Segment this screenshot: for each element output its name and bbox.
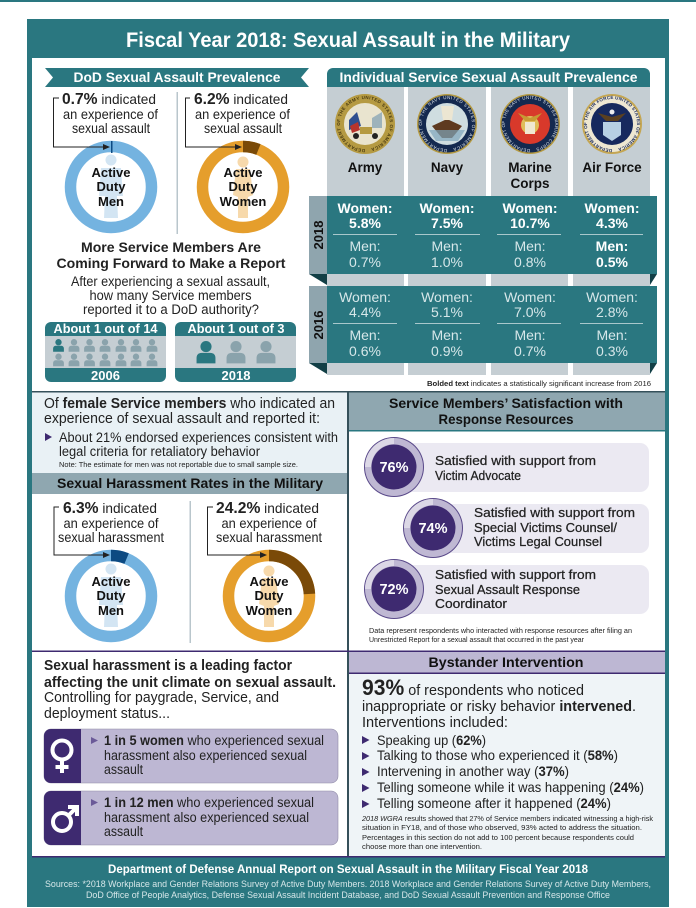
donut: men harassment: Men (98, 603, 124, 618)
service names: Army (348, 160, 383, 175)
women harassment text (216, 500, 322, 545)
service names: Marine (508, 160, 552, 175)
table: 2016: Women: (339, 289, 391, 305)
panel: bystander intervention (349, 652, 665, 857)
bystander bullets: Telling someone after it happened (24%) (377, 795, 611, 811)
seal: Air Force: DEPARTMENT OF THE AIR FORCE UNITED STATES OF AMERICA (584, 96, 640, 152)
service names: Navy (431, 160, 464, 175)
factor text: deployment status... (44, 706, 170, 722)
table: 2016: 7.0% (514, 304, 546, 320)
panel: retaliation: Of female Service members who indicated an (44, 395, 335, 412)
reporting question: how many Service members (90, 288, 252, 303)
bystander bullets: Intervening in another way (37%) (377, 763, 569, 779)
heading: satisfaction: Service Members’ Satisfaction with (389, 395, 623, 411)
callout: men (44, 791, 338, 845)
table: 2018: 0.7% (349, 254, 381, 270)
table: 2016: Men: (596, 327, 628, 343)
panel: harassment factor (32, 652, 347, 857)
box: 2018: 2018 (222, 368, 250, 383)
donut: women harassment: Active (249, 574, 289, 589)
bystander statement: Interventions included: (362, 714, 508, 731)
item: victim advocate (364, 437, 649, 497)
table: 2018 (309, 196, 657, 285)
donut: men harassment (70, 555, 152, 636)
table: 2018: Women: (338, 200, 392, 216)
bystander footnote: 2018 WGRA results showed that 27% of Service members indicated witnessing a high-risk (361, 814, 653, 823)
table: 2018: Men: (431, 238, 463, 254)
heading: bystander (349, 652, 665, 674)
satisfaction footnote (369, 628, 632, 644)
item: SARC (364, 559, 649, 619)
box: 2006: 2006 (91, 368, 120, 383)
factor text: Sexual harassment is a leading factor (44, 658, 292, 674)
table: 2016: Men: (431, 327, 463, 343)
item: SARC: 72% (379, 582, 409, 598)
table: 2018: 1.0% (431, 254, 463, 270)
panel: retaliation: Note: The estimate for men was not reportable due to small sample size. (59, 462, 298, 469)
bystander bullets: Talking to those who experienced it (58%) (377, 747, 618, 763)
men assault text (62, 91, 158, 136)
arrowhead (235, 144, 242, 150)
table: 2016: 4.4% (349, 304, 381, 320)
heading: harassment rates: Sexual Harassment Rates in the Military (57, 475, 323, 491)
bystander bullets: Speaking up (62%) (377, 732, 486, 748)
men harassment text: sexual harassment (58, 529, 164, 545)
arrow: women harassment (208, 507, 260, 555)
table note: Bolded text indicates a statistically significant increase from 2016 (427, 379, 651, 388)
donut: active duty men assault: Men (98, 194, 124, 209)
donut: men harassment: Duty (97, 588, 126, 603)
table: 2018: 2018 (311, 221, 326, 249)
box: 2018 (175, 322, 296, 383)
table: 2018: Women: (503, 200, 557, 216)
callout: women: 1 in 5 women who experienced sexual (104, 733, 324, 748)
reporting heading: More Service Members Are (81, 239, 261, 255)
table: 2016: 2016 (311, 311, 326, 339)
men harassment text: an experience of (64, 515, 159, 531)
seal: Army: DEPARTMENT OF THE ARMY UNITED STATES OF AMERICA (336, 96, 393, 152)
box: 2006 (45, 322, 166, 383)
heading: satisfaction: Response Resources (438, 411, 574, 427)
service heading: Individual Service Sexual Assault Prevalence (340, 69, 638, 85)
callout: men: assault (104, 824, 143, 839)
item: SARC: Coordinator (435, 596, 508, 611)
factor text (44, 658, 336, 722)
icon: male symbol (53, 807, 77, 831)
donut: women harassment (228, 556, 310, 636)
item: special victims counsel (403, 498, 649, 558)
donut: active duty women assault: Women (220, 194, 266, 209)
reporting heading (56, 239, 286, 271)
reporting question (71, 274, 270, 317)
heading: satisfaction (349, 392, 665, 431)
item: victim advocate: Satisfied with support from (435, 453, 596, 468)
table: 2016: 0.9% (431, 343, 463, 359)
women harassment text: an experience of (222, 515, 317, 531)
panel: retaliation: About 21% endorsed experiences consistent with (59, 430, 338, 445)
table: 2018: 0.8% (514, 254, 546, 270)
box: 2018: About 1 out of 3 (188, 322, 285, 336)
seal: Marine Corps: DEPARTMENT OF THE NAVY UNITED STATES MARINE CORPS (502, 96, 558, 152)
panel: retaliation: legal criteria for retaliatory behavior (59, 444, 260, 459)
ribbon: DoD prevalence heading (45, 68, 309, 87)
table: 2016: 0.6% (349, 343, 381, 359)
bystander statement (362, 675, 636, 731)
donut: active duty women assault: Active (223, 165, 263, 180)
table: 2016: Men: (514, 327, 546, 343)
table: 2016 (309, 286, 657, 374)
donut: active duty men assault: Duty (97, 179, 126, 194)
reporting question: After experiencing a sexual assault, (71, 274, 270, 289)
bystander bullets (362, 732, 644, 811)
table: 2018: Men: (349, 238, 381, 254)
item: SARC: Satisfied with support from (435, 567, 596, 582)
men harassment text (58, 500, 164, 545)
arrow: men harassment (54, 507, 104, 555)
panel: prevalence (32, 58, 665, 391)
donut: active duty women assault (202, 146, 284, 228)
seal: Navy: DEPARTMENT OF THE NAVY UNITED STATES OF AMERICA (418, 96, 476, 152)
callout: women: assault (104, 762, 143, 777)
bystander footnote: situation in FY18, and of those who observed, 93% acted to address the situation. (362, 823, 642, 832)
table: 2018: 5.8% (349, 215, 382, 231)
men assault text: sexual assault (72, 120, 150, 136)
panel: sexual harassment rates (32, 473, 347, 651)
women harassment text: 24.2% indicated (216, 500, 319, 517)
arrowhead (103, 144, 110, 150)
satisfaction footnote: Data represent respondents who interacted with response resources after filing an (369, 628, 632, 635)
reporting question: reported it to a DoD authority? (83, 302, 259, 317)
table: 2018: 0.5% (596, 254, 629, 270)
bystander statement: 93% of respondents who noticed (362, 675, 584, 700)
heading: harassment rates (32, 473, 347, 494)
panel: retaliation (32, 392, 347, 473)
men assault text: an experience of (63, 106, 158, 122)
table: 2016: Women: (586, 289, 638, 305)
heading: bystander: Bystander Intervention (428, 654, 584, 670)
table: 2016: 2.8% (596, 304, 628, 320)
bystander footnote: Percentages in this section do not add to 100 percent because respondents could (362, 833, 634, 842)
item: special victims counsel: 74% (418, 521, 448, 537)
item: victim advocate: Victim Advocate (435, 468, 521, 483)
service columns (327, 87, 650, 375)
donut: active duty men assault (70, 141, 152, 228)
item: victim advocate: 76% (379, 460, 409, 476)
bystander footnote (361, 814, 653, 851)
service names: Air Force (582, 160, 642, 175)
women assault text: sexual assault (204, 120, 282, 136)
ribbon: DoD prevalence heading: DoD Sexual Assault Prevalence (74, 69, 281, 85)
women harassment text: sexual harassment (216, 529, 322, 545)
footer (45, 864, 651, 900)
item: special victims counsel: Satisfied with support from (474, 505, 635, 520)
men harassment text: 6.3% indicated (63, 500, 157, 517)
donut: women harassment: Duty (255, 588, 284, 603)
donut: women harassment: Women (246, 603, 292, 618)
item: SARC: Sexual Assault Response (435, 582, 580, 597)
arrowhead (103, 552, 110, 558)
footer: Department of Defense Annual Report on Sexual Assault in the Military Fiscal Year 2018 (108, 864, 589, 876)
table: 2018: 4.3% (596, 215, 629, 231)
item: special victims counsel: Special Victims Counsel/ (474, 520, 617, 535)
callout: women: harassment also experienced sexual (104, 748, 307, 763)
women assault text (194, 91, 290, 136)
reporting heading: Coming Forward to Make a Report (56, 255, 286, 271)
table: 2018: 7.5% (431, 215, 464, 231)
panel: retaliation: experience of sexual assault and reported it: (44, 410, 320, 427)
icon: female symbol (52, 740, 72, 773)
callout: women (44, 729, 338, 783)
panel: satisfaction (349, 391, 665, 651)
table: 2018: Women: (585, 200, 639, 216)
item: special victims counsel: Victims Legal Counsel (474, 534, 602, 549)
footer: Sources: *2018 Workplace and Gender Relations Survey of Active Duty Members. 2018 Workplace and Gender Relations Survey of Active Duty Members, (45, 879, 651, 889)
factor text: Controlling for paygrade, Service, and (44, 690, 279, 706)
bystander statement: inappropriate or risky behavior intervened. (362, 698, 636, 715)
table: 2018: Men: (514, 238, 546, 254)
footer: DoD Office of People Analytics, Defense Sexual Assault Incident Database, and DoD Sexual Assault Prevention and Response Office (86, 890, 610, 900)
arrow: men assault (54, 98, 104, 147)
table: 2016: Women: (421, 289, 473, 305)
table: 2018: Women: (420, 200, 474, 216)
service names: Corps (510, 176, 550, 191)
women assault text: 6.2% indicated (194, 91, 288, 108)
service names (348, 160, 642, 191)
table: 2016: 0.7% (514, 343, 546, 359)
donut: active duty men assault: Active (91, 165, 131, 180)
bystander footnote: choose more than one intervention. (362, 842, 482, 851)
women assault text: an experience of (195, 106, 290, 122)
box: 2006: About 1 out of 14 (54, 322, 158, 336)
table: 2018: 10.7% (510, 215, 550, 231)
title: Fiscal Year 2018: Sexual Assault in the Military (126, 28, 570, 52)
arrow: women assault (186, 98, 236, 147)
donut: active duty women assault: Duty (229, 179, 258, 194)
donut: men harassment: Active (91, 574, 131, 589)
table: 2016: Women: (504, 289, 556, 305)
table: 2016: Men: (349, 327, 381, 343)
callout: men: harassment also experienced sexual (104, 810, 309, 825)
factor text: affecting the unit climate on sexual assault. (44, 675, 336, 691)
table: 2018: Men: (596, 238, 628, 254)
table: 2016: 0.3% (596, 343, 628, 359)
table: 2016: 5.1% (431, 304, 463, 320)
men assault text: 0.7% indicated (62, 91, 156, 108)
bystander bullets: Telling someone while it was happening (24%) (377, 779, 644, 795)
callout: men: 1 in 12 men who experienced sexual (104, 795, 314, 810)
arrowhead (260, 552, 267, 558)
satisfaction footnote: Unrestricted Report for a sexual assault that occurred in the past year (369, 637, 585, 644)
